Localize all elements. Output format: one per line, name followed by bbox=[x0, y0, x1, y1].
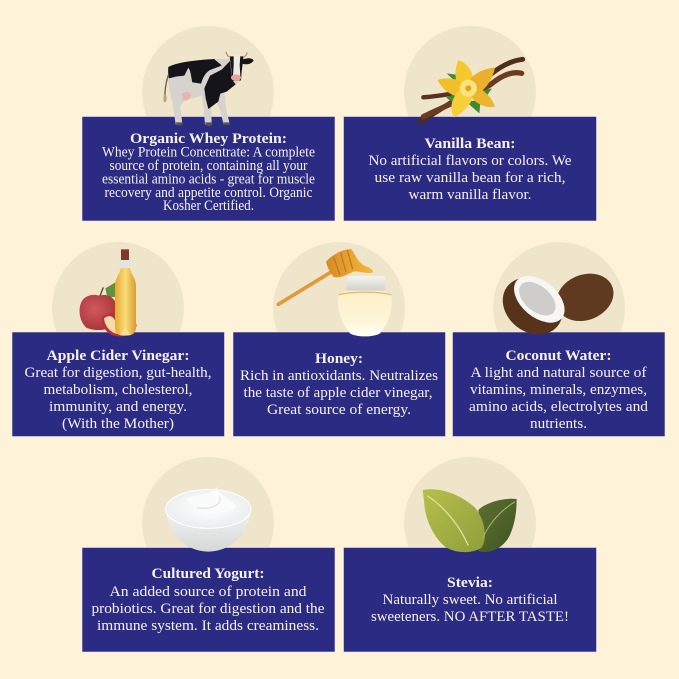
body text: stevia: sweeteners. NO AFTER TASTE! bbox=[371, 609, 569, 625]
body text: whey: Kosher Certified. bbox=[163, 198, 254, 214]
heading: yogurt: Cultured Yogurt: bbox=[152, 566, 264, 582]
text box: stevia bbox=[344, 548, 596, 652]
circle backdrop: yogurt bbox=[142, 457, 274, 589]
body text: yogurt: probiotics. Great for digestion and the bbox=[92, 601, 325, 617]
circle backdrop: whey bbox=[142, 26, 274, 158]
body text: yogurt bbox=[92, 584, 325, 634]
body text: vinegar: Great for digestion, gut-health, bbox=[24, 365, 212, 381]
text box: honey bbox=[233, 332, 446, 436]
icon: yogurt bowl bbox=[166, 487, 251, 552]
body text: coconut: vitamins, minerals, enzymes, bbox=[470, 382, 647, 398]
circle backdrop: vinegar bbox=[52, 242, 184, 374]
circle backdrop: stevia bbox=[404, 457, 536, 589]
icon: cow bbox=[163, 52, 254, 126]
icon: stevia leaves bbox=[423, 489, 517, 552]
body text: stevia bbox=[371, 592, 569, 625]
icon: coconuts bbox=[491, 265, 621, 346]
body text: whey: recovery and appetite control. Organic bbox=[104, 185, 312, 201]
circle backdrop: vanilla bbox=[404, 26, 536, 158]
text box: yogurt bbox=[82, 548, 335, 652]
panel: vanilla bean bbox=[344, 26, 596, 221]
text box: whey bbox=[82, 116, 335, 221]
icon: honey dipper and jar bbox=[278, 249, 392, 336]
panel: honey bbox=[233, 242, 446, 436]
panel: stevia bbox=[344, 457, 596, 652]
body text: whey: essential amino acids - great for muscle bbox=[102, 172, 315, 188]
body text: whey: source of protein, containing all your bbox=[110, 158, 308, 174]
body text: vinegar bbox=[24, 365, 212, 432]
body text: vanilla bbox=[368, 153, 572, 203]
body text: yogurt: immune system. It adds creaminess. bbox=[97, 618, 319, 634]
text box: vinegar bbox=[12, 332, 224, 436]
text box: coconut bbox=[452, 332, 665, 436]
body text: honey bbox=[240, 368, 438, 418]
heading: vinegar: Apple Cider Vinegar: bbox=[46, 348, 190, 364]
body text: coconut: amino acids, electrolytes and bbox=[469, 399, 649, 415]
body text: yogurt: An added source of protein and bbox=[110, 584, 307, 600]
body text: vinegar: metabolism, cholesterol, bbox=[44, 382, 192, 398]
body text: coconut: A light and natural source of bbox=[470, 365, 646, 381]
heading: vanilla: Vanilla Bean: bbox=[424, 136, 516, 152]
body text: vanilla: warm vanilla flavor. bbox=[408, 187, 532, 203]
body text: honey: the taste of apple cider vinegar, bbox=[244, 385, 432, 401]
panel: cultured yogurt bbox=[82, 457, 335, 652]
body text: honey: Great source of energy. bbox=[267, 402, 411, 418]
body text: vanilla: No artificial flavors or colors. We bbox=[368, 153, 572, 169]
heading: coconut: Coconut Water: bbox=[506, 348, 612, 364]
panel: coconut water bbox=[452, 242, 665, 436]
body text: vanilla: use raw vanilla bean for a rich, bbox=[374, 170, 566, 186]
body text: coconut: nutrients. bbox=[530, 416, 587, 432]
heading: whey: Organic Whey Protein: bbox=[130, 131, 287, 147]
body text: whey: Whey Protein Concentrate: A complete bbox=[102, 144, 315, 160]
body text: vinegar: immunity, and energy. bbox=[49, 399, 187, 415]
circle backdrop: coconut bbox=[493, 242, 625, 374]
body text: coconut bbox=[469, 365, 649, 432]
heading: honey: Honey: bbox=[315, 351, 363, 367]
body text: vinegar: (With the Mother) bbox=[62, 416, 174, 432]
panel: organic whey protein bbox=[82, 26, 335, 221]
panel: apple cider vinegar bbox=[12, 242, 224, 436]
circle backdrop: honey bbox=[273, 242, 405, 374]
body text: whey bbox=[102, 144, 315, 214]
heading: stevia: Stevia: bbox=[447, 575, 493, 591]
body text: stevia: Naturally sweet. No artificial bbox=[382, 592, 558, 608]
icon: apple and vinegar bottle bbox=[80, 249, 137, 336]
text box: vanilla bbox=[344, 116, 596, 221]
icon: vanilla flower and beans bbox=[420, 59, 523, 122]
body text: honey: Rich in antioxidants. Neutralizes bbox=[240, 368, 438, 384]
